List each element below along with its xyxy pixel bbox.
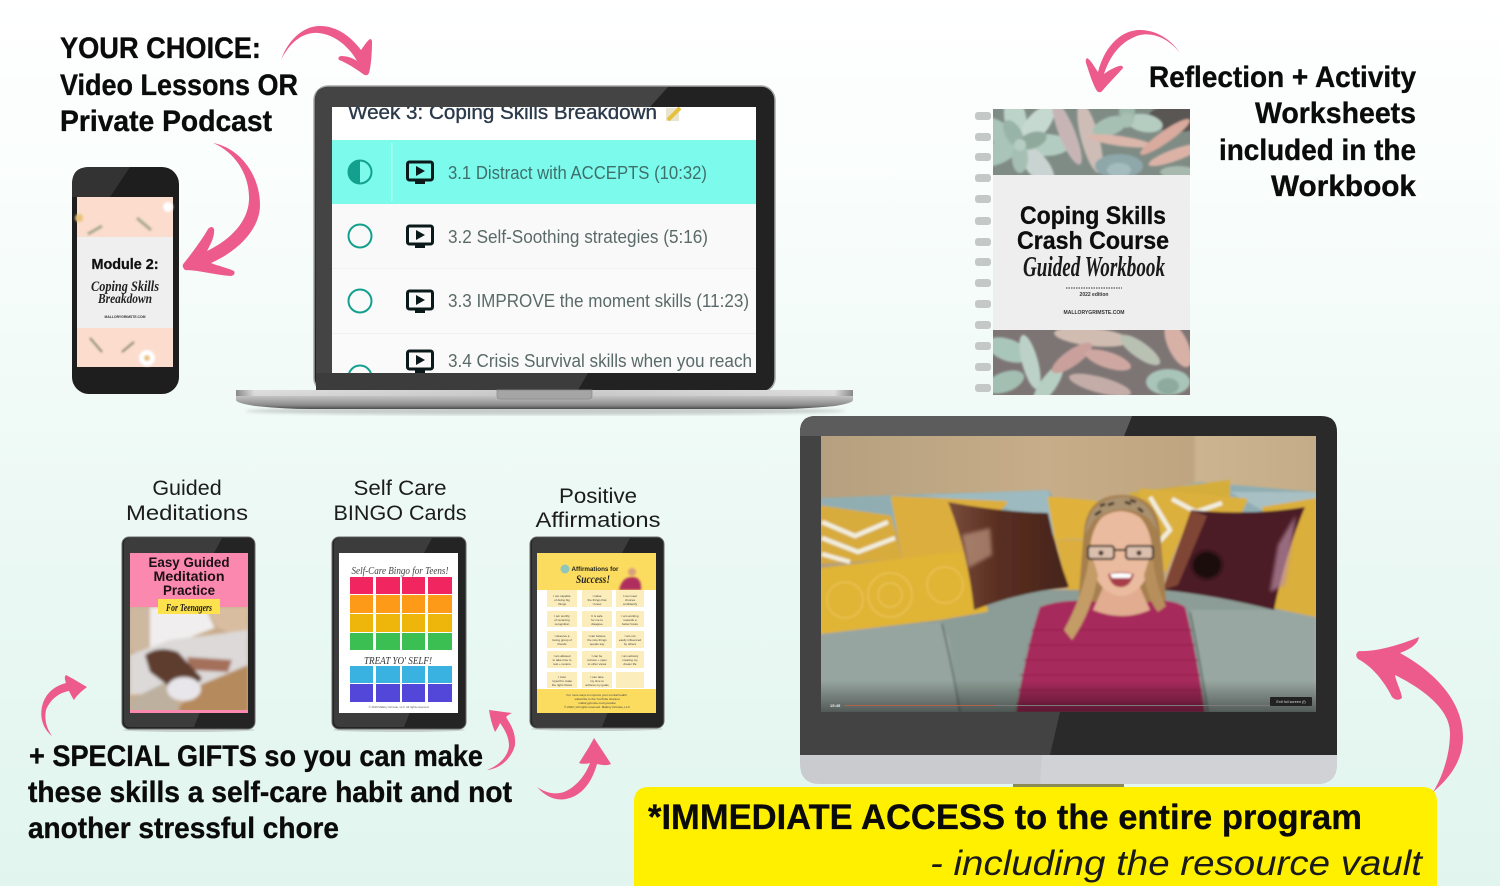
meditation title <box>148 554 230 598</box>
chevron left stripes <box>822 522 895 562</box>
callout: immediate access: - including the resource vault <box>930 844 1423 883</box>
phone title: Module 2: <box>92 257 158 273</box>
heading: workbook note: included in the <box>1219 134 1416 167</box>
succulent photo bottom <box>993 330 1190 395</box>
label: positive affirmations: Affirmations <box>536 508 660 532</box>
affirmation texts: the things that <box>588 598 607 602</box>
affirmations footer: For more ways to improve your mental health, <box>566 693 628 697</box>
affirmations footer: subscribe to the YouTube channel <box>574 697 620 701</box>
heading: your choice: Video Lessons OR <box>60 69 298 102</box>
affirmation texts: curious + open <box>587 658 607 662</box>
affirmation texts: I am allowed <box>554 654 571 658</box>
callout: immediate access: *IMMEDIATE ACCESS to the entire program <box>648 798 1362 837</box>
lesson row 3.2 <box>348 224 707 248</box>
affirmation texts: to take time to <box>553 658 572 662</box>
affirmation texts: achieve my goals <box>585 683 609 687</box>
phone script title: Coping Skills <box>91 279 159 295</box>
monitor chin <box>800 750 1337 784</box>
affirmations footer: mallorygrimste.com/youtube <box>578 701 616 705</box>
affirmation cards <box>547 590 644 688</box>
yellow pillows <box>893 498 1005 558</box>
lesson row 3.4: 3.4 Crisis Survival skills when you reach <box>448 351 752 371</box>
affirmation texts: It is safe <box>591 614 603 618</box>
affirmation texts: easily influenced <box>619 638 641 642</box>
heading: your choice <box>60 32 298 138</box>
bingo title: Self-Care Bingo for Teens! <box>352 565 449 577</box>
phone script title <box>91 279 159 307</box>
affirmation texts: I am actively <box>622 654 639 658</box>
monitor mockup <box>800 416 1337 788</box>
affirmations footer <box>564 693 631 709</box>
affirmation texts <box>552 594 641 687</box>
meditation title: Practice <box>163 582 215 598</box>
arrow: to bingo cards <box>487 710 515 770</box>
heading: workbook note <box>1149 61 1416 203</box>
workbook script subtitle: Guided Workbook <box>1023 252 1165 283</box>
workbook edition <box>1064 288 1124 316</box>
affirmation texts: I can take <box>590 675 604 679</box>
presenter cutout <box>619 568 641 590</box>
affirmation texts: I am working <box>621 614 639 618</box>
phone url: MALLORYGRIMSTE.COM <box>105 315 146 319</box>
heading: your choice: Private Podcast <box>60 105 272 138</box>
affirmation texts: recognition <box>555 622 570 626</box>
monitor bezel <box>800 416 1337 755</box>
affirmation texts: I am worthy <box>554 614 570 618</box>
affirmation texts: myself to make <box>552 679 572 683</box>
back blue pillows <box>821 482 1316 530</box>
affirmation texts: I am capable <box>553 594 571 598</box>
laptop mockup <box>236 86 853 415</box>
arrow: to workbook <box>1086 30 1180 92</box>
glasses <box>1088 546 1153 559</box>
lesson row 3.1 <box>332 140 756 204</box>
affirmation texts: I can meet <box>623 594 637 598</box>
laptop base <box>236 390 853 415</box>
workbook title: Crash Course <box>1017 227 1169 255</box>
mouth <box>1108 572 1134 587</box>
affirmations title: Success! <box>576 572 610 586</box>
affirmation texts: towards a <box>623 618 637 622</box>
arrow: to phone <box>183 143 260 276</box>
affirmation texts: the nice things <box>587 638 607 642</box>
laptop screen <box>332 102 756 388</box>
week heading: Week 3: Coping Skills Breakdown <box>348 102 657 124</box>
affirmation texts: I can believe <box>589 634 606 638</box>
heading: special gifts: + SPECIAL GIFTS so you can make <box>29 740 483 773</box>
spiral rings <box>975 112 991 392</box>
workbook mockup <box>975 109 1190 395</box>
affirmation texts: creating my <box>622 658 638 662</box>
lesson row 3.1: 3.1 Distract with ACCEPTS (10:32) <box>448 163 707 183</box>
phone script title: Breakdown <box>97 292 152 307</box>
affirmation texts: of receiving <box>554 618 570 622</box>
heading: workbook note: Workbook <box>1271 170 1416 203</box>
bingo grid <box>350 577 452 650</box>
affirmation texts: my time to <box>590 679 604 683</box>
neck <box>1093 585 1150 616</box>
label: guided meditations: Guided <box>152 476 222 500</box>
lesson row 3.3 <box>332 268 756 314</box>
succulent photo top <box>993 109 1190 175</box>
sweater <box>1016 601 1205 713</box>
affirmation texts: disagree <box>591 622 603 626</box>
callout: immediate access <box>634 787 1437 886</box>
heading: special gifts: these skills a self-care habit and not <box>28 776 512 809</box>
affirmations title <box>560 564 619 586</box>
affirmations footer: © 2022 | All rights reserved. Mallory Grimste, LLC <box>564 705 631 709</box>
video still: presenter on sofa: 15:45 <box>830 703 841 708</box>
affirmation texts: choices <box>625 598 636 602</box>
video still: presenter on sofa <box>821 436 1316 715</box>
workbook edition: 2022 edition <box>1080 292 1108 298</box>
arrow: to affirmations <box>537 738 611 800</box>
arrow: to guided meditations <box>41 675 87 736</box>
hair strands <box>1064 550 1098 640</box>
meditation title: Easy Guided <box>148 554 230 570</box>
sequin pillow maroon <box>1163 507 1305 610</box>
label: guided meditations <box>126 476 248 525</box>
workbook title <box>1017 202 1169 255</box>
exit full screen tooltip <box>1270 697 1312 706</box>
sofa <box>821 590 1316 715</box>
chevron right pillow <box>1140 490 1246 570</box>
for teenagers tag: For Teenagers <box>165 602 212 614</box>
icon: pencil note <box>666 108 680 121</box>
label: self care bingo cards <box>334 476 466 525</box>
bingo footer: © 2019 Mallory Grimste, LLC. All rights reserved. <box>369 705 430 709</box>
heading: special gifts: another stressful chore <box>28 812 339 845</box>
label: guided meditations: Meditations <box>126 501 248 525</box>
affirmation texts: confidently <box>623 602 638 606</box>
tablet: guided meditation <box>122 537 255 732</box>
affirmations title: Affirmations for <box>572 567 619 573</box>
affirmation texts: dream life <box>623 662 637 666</box>
hair back <box>1078 495 1166 612</box>
meditation photo <box>130 607 248 712</box>
affirmation texts: I can be <box>592 654 603 658</box>
affirmation texts: for me to <box>591 618 603 622</box>
for teenagers tag <box>158 599 220 614</box>
arrow: to monitor <box>1356 637 1463 792</box>
phone mockup <box>72 167 179 394</box>
lesson row 3.2: 3.2 Self-Soothing strategies (5:16) <box>448 227 708 247</box>
affirmation texts: friends <box>557 642 567 646</box>
affirmation texts: the right choice <box>552 683 572 687</box>
affirmation texts: people say <box>590 642 605 646</box>
affirmation texts: rest + restore <box>553 662 571 666</box>
sequin pillow brown <box>948 502 1069 610</box>
lesson row 3.4 <box>332 333 756 373</box>
affirmation texts: of doing big <box>554 598 570 602</box>
heading: workbook note: Reflection + Activity <box>1149 61 1416 94</box>
video controls <box>821 684 1316 712</box>
label: self care bingo cards: BINGO Cards <box>334 501 466 525</box>
tablet: affirmations <box>530 537 664 731</box>
treat grid <box>350 666 452 702</box>
face <box>1090 508 1152 596</box>
headband <box>1085 497 1157 535</box>
affirmation texts: I am not <box>625 634 636 638</box>
lesson row 3.3: 3.3 IMPROVE the moment skills (11:23) <box>448 291 749 311</box>
workbook edition: MALLORYGRIMSTE.COM <box>1064 310 1124 316</box>
heading: workbook note: Worksheets <box>1255 97 1416 130</box>
affirmation texts: I value <box>593 594 602 598</box>
workbook title: Coping Skills <box>1020 202 1166 230</box>
meditation title: Meditation <box>154 568 224 584</box>
cover white band <box>993 175 1190 330</box>
affirmation texts: I trust <box>558 675 566 679</box>
heading: special gifts <box>28 740 512 845</box>
affirmation texts: I deserve a <box>555 634 570 638</box>
affirmation texts: to other views <box>588 662 607 666</box>
exit full screen tooltip: Exit full screen (f) <box>1276 700 1306 704</box>
heading: your choice: YOUR CHOICE: <box>60 32 261 65</box>
affirmation texts: things <box>558 602 566 606</box>
tablet: bingo cards <box>332 537 466 732</box>
affirmation texts: loving group of <box>552 638 572 642</box>
arrow: to laptop <box>281 26 372 75</box>
treat yo self: TREAT YO' SELF! <box>364 655 432 667</box>
affirmation texts: by others <box>624 642 637 646</box>
affirmation texts: better future <box>622 622 638 626</box>
label: positive affirmations: Positive <box>559 484 637 508</box>
label: positive affirmations <box>536 484 660 532</box>
label: self care bingo cards: Self Care <box>354 476 446 500</box>
affirmation texts: I know <box>593 602 602 606</box>
